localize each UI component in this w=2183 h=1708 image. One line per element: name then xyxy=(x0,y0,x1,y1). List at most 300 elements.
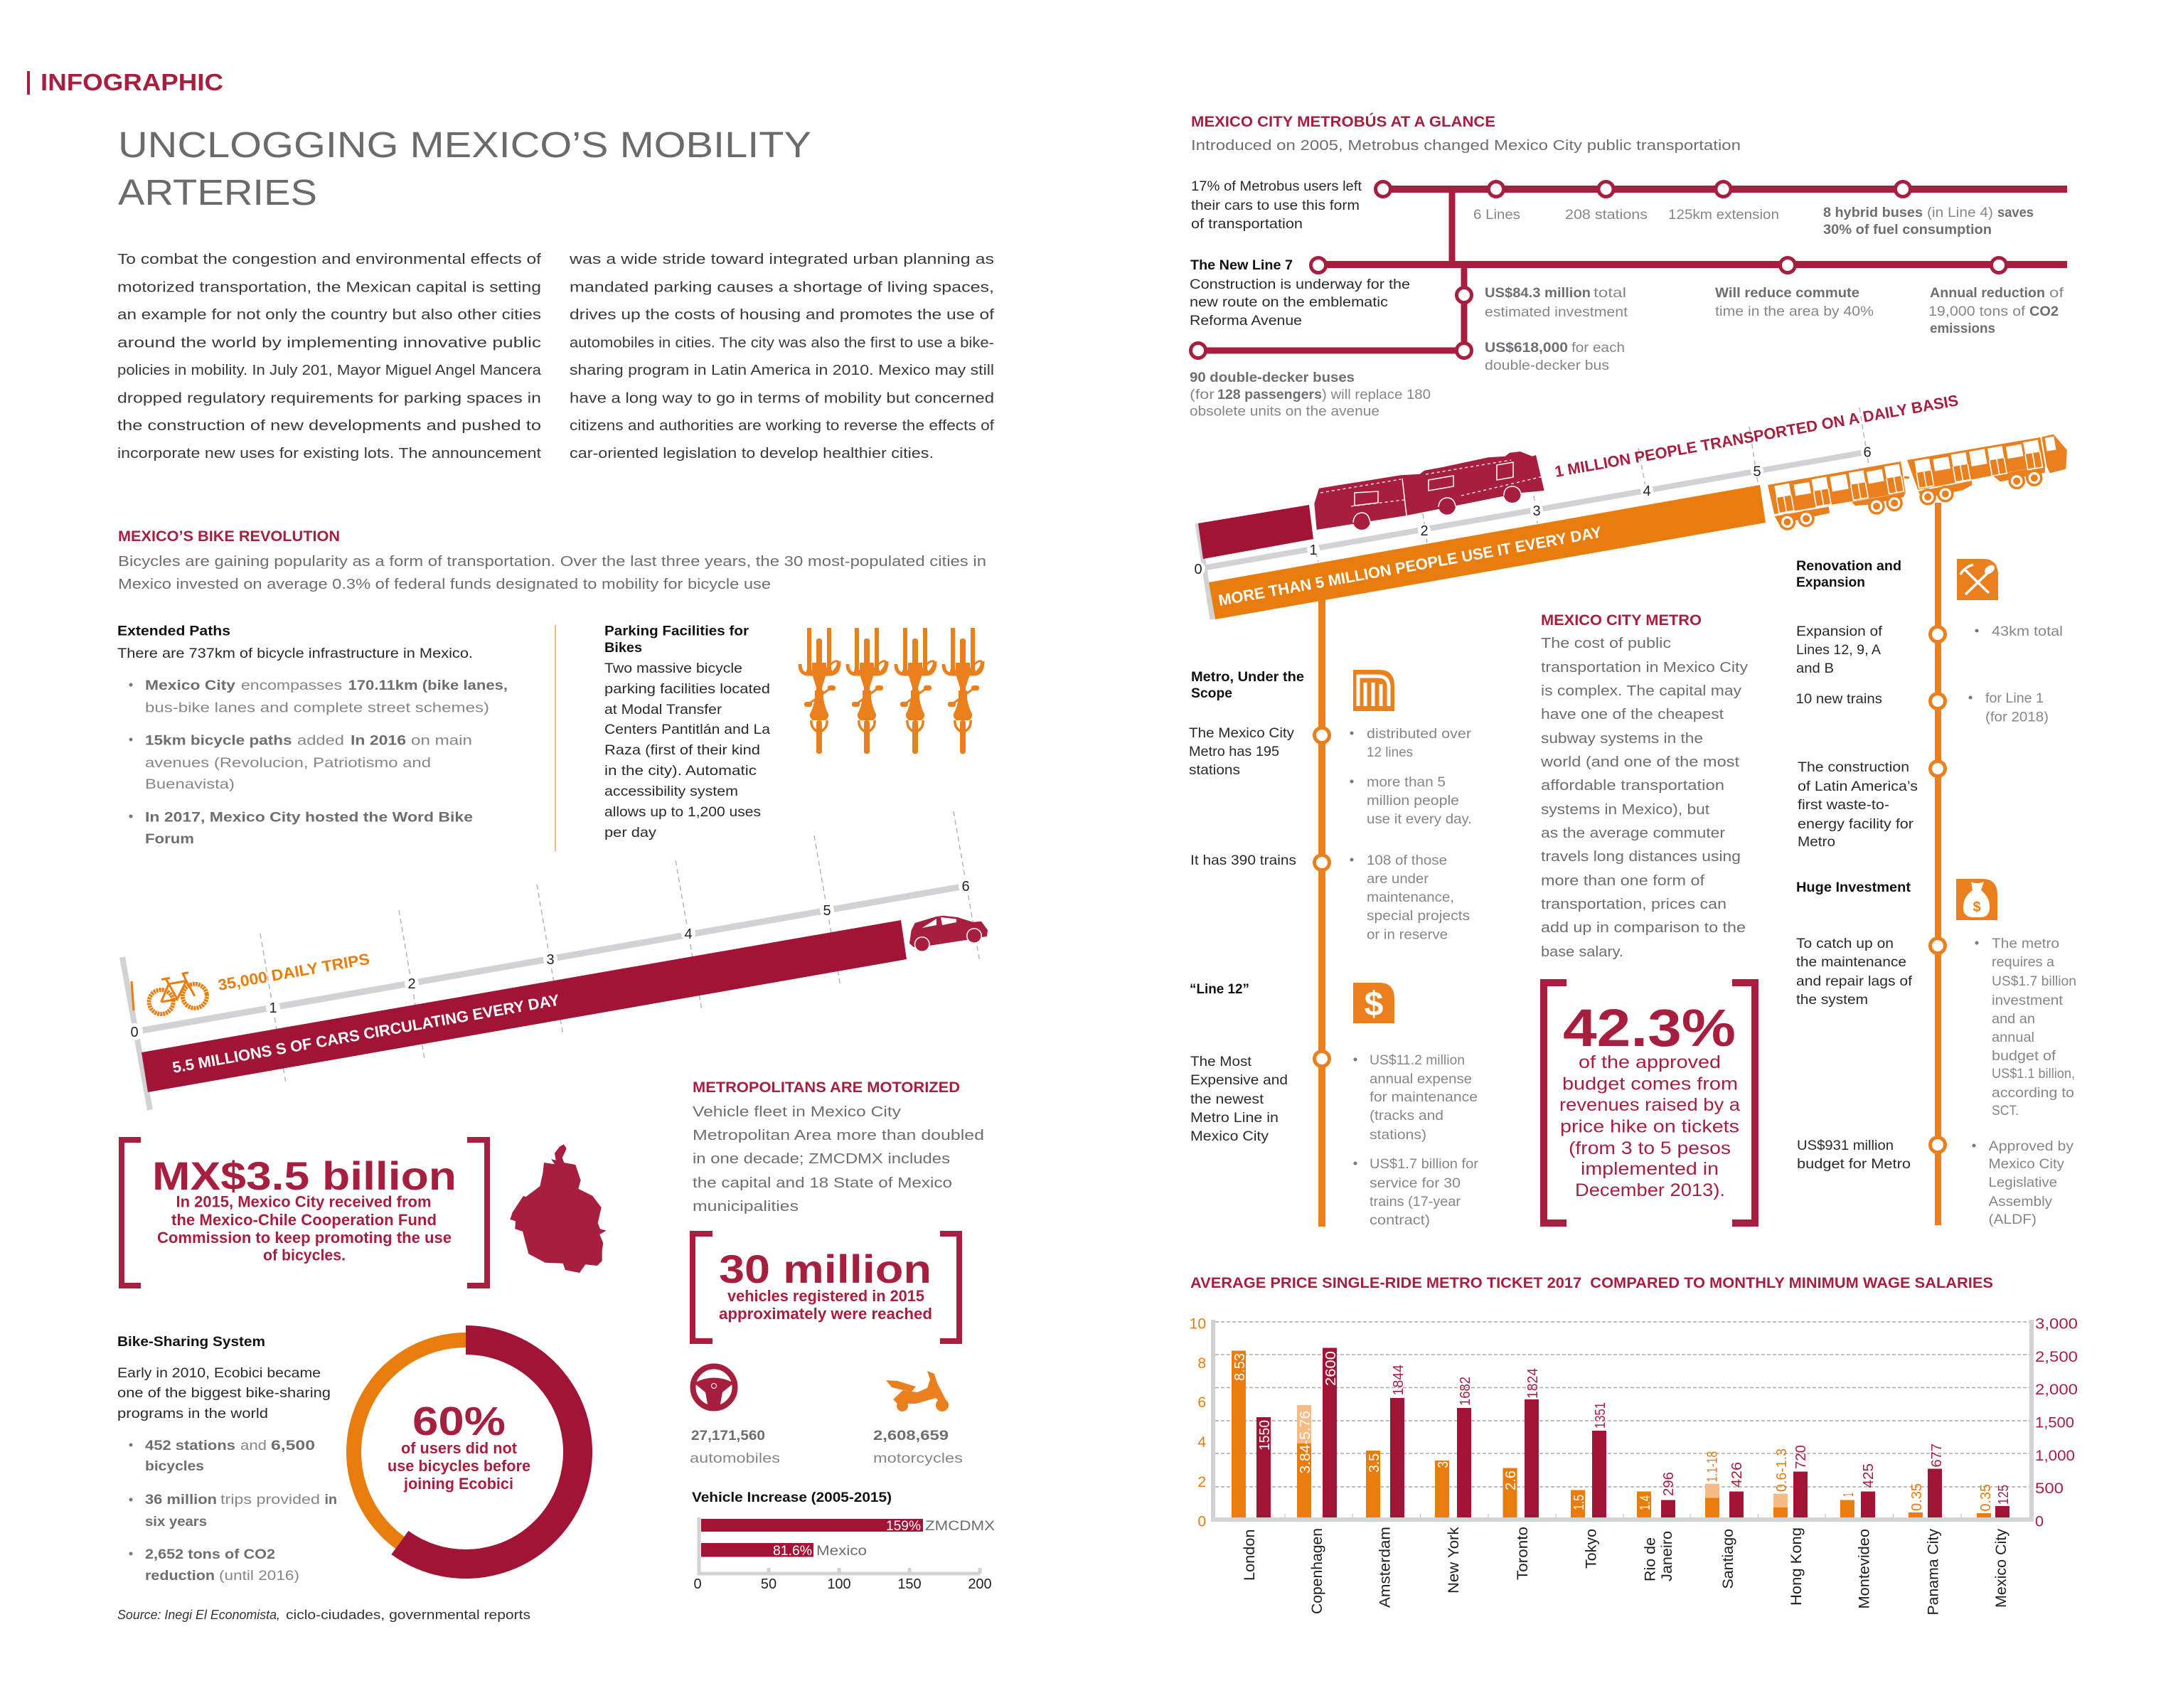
bar: Mexico: 81.6% xyxy=(773,1544,812,1559)
panel: Mexico City metro text: MEXICO CITY METRO xyxy=(1541,612,1702,629)
expansion items: (for 2018) xyxy=(1985,710,2049,725)
title xyxy=(118,124,811,213)
panel: parking facilities: at Modal Transfer xyxy=(604,702,722,717)
panel: extended paths: Buenavista) xyxy=(145,776,235,792)
expansion items: for Line 1 xyxy=(1985,690,2044,706)
line 12 details: Mexico City xyxy=(1190,1128,1269,1144)
investment items: To catch up on xyxy=(1796,936,1894,951)
investment items: budget for Metro xyxy=(1797,1156,1911,1172)
line 12 details: US$1.7 billion for xyxy=(1370,1156,1479,1172)
investment items: US$1.1 billion, xyxy=(1992,1066,2075,1082)
value labels: 0.35 xyxy=(1909,1483,1925,1511)
stop labels line 1: 30% of fuel consumption xyxy=(1823,222,1992,237)
axis numbers: 2 xyxy=(407,976,416,992)
bar chart: vehicle increase: 150 xyxy=(897,1576,922,1592)
stop labels line 2: for each xyxy=(1571,340,1625,356)
bar: ZMCDMX: ZMCDMX xyxy=(925,1519,995,1534)
axis numbers: 2 xyxy=(1420,523,1429,539)
intro text column 2: car-oriented legislation to develop healthier cities. xyxy=(570,445,934,461)
heading: metro under the scope xyxy=(1191,669,1304,701)
note: 17% left cars: of transportation xyxy=(1191,216,1303,232)
panel: extended paths: encompasses xyxy=(241,678,342,693)
line 12 details: US$11.2 million xyxy=(1370,1052,1465,1068)
bars: ticket price xyxy=(1232,1351,1991,1517)
bike trips marker xyxy=(132,981,134,1010)
city labels: Mexico City xyxy=(1993,1529,2009,1608)
icon: steering wheel xyxy=(693,1367,735,1408)
donut chart: 60%: 60% xyxy=(412,1399,506,1444)
chart title: ticket price vs wage: AVERAGE PRICE SINGLE-RIDE METRO TICKET 2017 COMPARED TO MONTHLY MINIMUM WAGE SALARIES xyxy=(1190,1275,1993,1291)
expansion items: first waste-to- xyxy=(1798,797,1889,813)
city labels: Tokyo xyxy=(1583,1529,1600,1569)
city labels: Santiago xyxy=(1720,1529,1736,1589)
panel: bike-sharing text: bicycles xyxy=(145,1458,204,1474)
note: double-decker buses: (for xyxy=(1190,387,1215,402)
panel: Mexico City metro text: add up in comparison to the xyxy=(1541,920,1746,936)
panel: extended paths: Forum xyxy=(145,831,194,847)
panel: extended paths: 170.11km (bike lanes, xyxy=(348,678,508,693)
line 12 details: Metro Line in xyxy=(1190,1110,1279,1126)
intro text column 2: citizens and authorities are working to reverse the effects of xyxy=(570,417,994,434)
panel: extended paths xyxy=(117,623,508,847)
note: double-decker buses: 90 double-decker buses xyxy=(1190,370,1355,385)
stop labels line 1: saves xyxy=(1997,205,2034,220)
label: metro riders: MORE THAN 5 MILLION PEOPLE USE IT EVERY DAY xyxy=(1217,523,1603,609)
panel: metropolitans are motorized: Metropolitan Area more than doubled xyxy=(693,1128,984,1143)
stop labels line 2: time in the area by 40% xyxy=(1715,304,1874,319)
panel: Mexico City metro text xyxy=(1540,612,1748,960)
intro text column 2: mandated parking causes a shortage of living spaces, xyxy=(570,279,994,296)
city labels: Hong Kong xyxy=(1788,1527,1805,1606)
metro-style line diagram xyxy=(1190,178,2067,420)
line 12 details: (tracks and xyxy=(1370,1108,1443,1123)
label: daily trips: 35,000 DAILY TRIPS xyxy=(217,950,371,994)
line 12 details: stations) xyxy=(1370,1127,1426,1143)
value labels: 1.5 xyxy=(1571,1495,1587,1510)
note: new line 7 xyxy=(1190,257,1410,329)
stop labels line 1: 8 hybrid buses xyxy=(1823,205,1923,220)
investment items: US$1.7 billion xyxy=(1992,973,2076,989)
intro text column 1: To combat the congestion and environmental effects of xyxy=(117,251,541,267)
stop labels line 2: Will reduce commute xyxy=(1715,285,1859,301)
donut chart: 60% xyxy=(354,1340,578,1564)
stop labels line 2: of xyxy=(2049,285,2064,301)
left axis labels: 0 xyxy=(1197,1513,1206,1530)
heading: renovation: Renovation and xyxy=(1796,558,1901,574)
investment items: requires a xyxy=(1992,954,2054,970)
investment items: Legislative xyxy=(1988,1175,2057,1190)
heading: renovation: Expansion xyxy=(1796,575,1865,590)
panel: bike-sharing text: 2,652 tons of CO2 xyxy=(145,1547,275,1562)
donut chart: 60%: joining Ecobici xyxy=(403,1475,513,1493)
city labels: Copenhagen xyxy=(1309,1528,1325,1614)
investment items: annual xyxy=(1992,1030,2034,1045)
line 12 details: annual expense xyxy=(1370,1071,1472,1087)
panel: parking facilities: allows up to 1,200 uses xyxy=(604,804,761,820)
icon: tools xyxy=(1957,559,1998,600)
city labels: Toronto xyxy=(1515,1527,1531,1580)
investment items: The metro xyxy=(1992,936,2059,951)
panel: bike-sharing text: six years xyxy=(145,1514,207,1530)
left axis labels xyxy=(1190,1315,1206,1530)
axis numbers: 4 xyxy=(684,927,693,942)
value labels: 426 xyxy=(1729,1462,1745,1488)
note: 17% left cars: 17% of Metrobus users left xyxy=(1191,178,1362,194)
panel: Mexico City metro text: as the average commuter xyxy=(1541,826,1725,841)
expansion items: Lines 12, 9, A xyxy=(1796,642,1881,658)
callout: 42.3%: revenues raised by a xyxy=(1559,1095,1740,1115)
note: new line 7: Construction is underway for the xyxy=(1190,277,1410,292)
intro text column 2 xyxy=(569,251,994,461)
stop labels line 2: 19,000 tons of xyxy=(1928,304,2026,319)
icon: money bag xyxy=(1956,879,1997,920)
slanted chart: cars vs bikes xyxy=(122,811,988,1110)
value labels: 8.53 xyxy=(1232,1353,1248,1381)
stations: distributed over xyxy=(1367,726,1472,742)
panel: Mexico City metro text: affordable transportation xyxy=(1541,778,1724,794)
city labels: Janeiro xyxy=(1659,1531,1675,1581)
icon: train car 2 xyxy=(1907,432,2072,506)
heading: Mexico's bike revolution xyxy=(118,528,986,592)
value labels: 2.6 xyxy=(1503,1471,1519,1490)
donut chart: 60%: of users did not xyxy=(401,1439,518,1457)
callout: 42.3%: budget comes from xyxy=(1562,1074,1738,1094)
investment items: Assembly xyxy=(1988,1194,2052,1210)
right axis labels: 1,000 xyxy=(2035,1448,2075,1464)
bar: metrobus xyxy=(1198,505,1313,559)
panel: parking facilities: accessibility system xyxy=(604,784,738,799)
intro text column 2: automobiles in cities. The city was also the first to use a bike- xyxy=(570,334,994,351)
value labels: 3 xyxy=(1436,1461,1451,1468)
value labels: 1.1-18 xyxy=(1705,1451,1721,1482)
panel: extended paths: In 2017, Mexico City hosted the Word Bike xyxy=(145,809,473,825)
investment items: Mexico City xyxy=(1988,1156,2064,1172)
bar chart: vehicle increase: 100 xyxy=(827,1576,851,1592)
investment items: and an xyxy=(1992,1011,2035,1027)
right axis labels: 1,500 xyxy=(2035,1415,2074,1431)
callout: 30 million xyxy=(693,1234,959,1341)
note: new line 7: Reforma Avenue xyxy=(1190,313,1302,329)
panel: extended paths: 15km bicycle paths xyxy=(145,732,292,748)
stop labels line 2: US$618,000 xyxy=(1485,340,1568,356)
note: new line 7: new route on the emblematic xyxy=(1190,294,1388,310)
value labels: 296 xyxy=(1661,1472,1677,1496)
icon: four parked bicycles xyxy=(800,628,983,754)
stop labels line 2 xyxy=(1485,285,2064,373)
line 12 details: service for 30 xyxy=(1370,1175,1461,1191)
panel: parking facilities: per day xyxy=(604,825,656,840)
stop labels line 2: Annual reduction xyxy=(1930,285,2045,301)
divider between paths and parking xyxy=(555,625,556,851)
axis numbers: 4 xyxy=(1643,484,1651,499)
icon: scooter xyxy=(886,1371,949,1411)
value labels: 125 xyxy=(1996,1485,2012,1505)
callout: MX$3.5 billion xyxy=(122,1140,487,1286)
value labels: 1682 xyxy=(1458,1377,1473,1406)
source note: Source: Inegi El Economista, xyxy=(117,1608,280,1622)
investment items: investment xyxy=(1992,993,2064,1008)
panel: extended paths: In 2016 xyxy=(351,732,406,748)
value labels: 2600 xyxy=(1323,1351,1339,1386)
bar: ZMCDMX xyxy=(701,1519,995,1534)
axis numbers: 0 xyxy=(1194,562,1202,577)
panel: extended paths: Mexico City xyxy=(145,678,235,693)
intro text column 1: motorized transportation, the Mexican capital is setting xyxy=(117,279,541,296)
panel: bike-sharing text: in xyxy=(324,1492,337,1507)
bar chart: vehicle increase: 50 xyxy=(761,1576,776,1592)
expansion items: of Latin America’s xyxy=(1798,779,1918,794)
expansion items: Expansion of xyxy=(1796,624,1883,639)
note: double-decker buses: ) will replace 180 xyxy=(1322,387,1431,402)
vehicle counts: 2,608,659 xyxy=(873,1428,949,1443)
panel: bike-sharing text: reduction xyxy=(145,1568,215,1584)
trains: are under xyxy=(1367,871,1429,887)
stop labels line 2: CO2 xyxy=(2029,304,2059,319)
title: ARTERIES xyxy=(118,172,317,213)
stations: use it every day. xyxy=(1367,811,1472,827)
bar: metro xyxy=(1209,485,1766,619)
investment items: and repair lags of xyxy=(1796,973,1913,989)
panel: bike-sharing text: trips provided xyxy=(220,1492,320,1507)
heading: Mexico's bike revolution: Bicycles are gaining popularity as a form of transportation. Over the last three years, the 30 most-populated cities in xyxy=(118,554,986,570)
investment items: according to xyxy=(1992,1085,2074,1101)
value labels: 1824 xyxy=(1525,1368,1541,1399)
note: 17% left cars: their cars to use this form xyxy=(1191,198,1360,213)
heading: line 12: “Line 12” xyxy=(1190,981,1249,997)
right axis labels: 3,000 xyxy=(2035,1315,2078,1333)
vehicle counts xyxy=(690,1428,963,1466)
stations: million people xyxy=(1367,793,1459,808)
panel: metropolitans are motorized: the capital and 18 State of Mexico xyxy=(693,1175,952,1191)
panel: Mexico City metro text: The cost of public xyxy=(1541,636,1671,651)
callout: MX$3.5 billion: the Mexico-Chile Cooperation Fund xyxy=(171,1211,437,1229)
axis numbers: 0 xyxy=(130,1025,139,1040)
value labels: 0.35 xyxy=(1978,1484,1994,1512)
panel: parking facilities: Parking Facilities for xyxy=(604,623,749,639)
stations: stations xyxy=(1189,762,1240,778)
panel: bike-sharing text: 6,500 xyxy=(271,1438,315,1453)
trains xyxy=(1190,853,1470,943)
left axis labels: 10 xyxy=(1190,1315,1206,1333)
bar chart: vehicle increase: 0 xyxy=(693,1576,702,1592)
value labels: 1550 xyxy=(1257,1420,1273,1451)
donut chart: 60%: use bicycles before xyxy=(388,1457,530,1475)
left axis labels: 2 xyxy=(1197,1474,1206,1490)
panel: Mexico City metro text: more than one form of xyxy=(1541,873,1705,889)
trains: 108 of those xyxy=(1367,853,1447,868)
axis numbers: 6 xyxy=(1863,445,1872,461)
trains: maintenance, xyxy=(1367,890,1454,905)
axis numbers: 1 xyxy=(269,1000,277,1016)
expansion items: 10 new trains xyxy=(1796,691,1882,707)
heading: Mexico's bike revolution: MEXICO’S BIKE REVOLUTION xyxy=(118,528,340,545)
slanted chart: metrobus vs metro riders xyxy=(1191,391,2072,619)
left axis labels: 4 xyxy=(1197,1434,1206,1451)
value labels: 3.84-5.76 xyxy=(1298,1411,1313,1473)
line 12 details: contract) xyxy=(1370,1212,1430,1228)
heading: Mexico's bike revolution: Mexico invested on average 0.3% of federal funds designated to mobility for bicycle use xyxy=(118,577,771,592)
panel: bike-sharing text: Early in 2010, Ecobici became xyxy=(117,1365,321,1381)
callout: 42.3% xyxy=(1544,983,1755,1223)
vehicle counts: motorcycles xyxy=(873,1451,963,1466)
city labels: New York xyxy=(1446,1527,1462,1594)
intro text column 2: have a long way to go in terms of mobility but concerned xyxy=(570,390,994,407)
callout: MX$3.5 billion: MX$3.5 billion xyxy=(152,1153,457,1198)
line 12 details: trains (17-year xyxy=(1370,1194,1461,1210)
panel: Mexico City metro text: have one of the cheapest xyxy=(1541,707,1724,722)
vehicle counts: 27,171,560 xyxy=(691,1428,765,1443)
stop labels line 1: 6 Lines xyxy=(1473,207,1520,223)
panel: bike-sharing text: Bike-Sharing System xyxy=(117,1334,265,1350)
investment items: budget of xyxy=(1992,1048,2056,1064)
callout: 42.3%: (from 3 to 5 pesos xyxy=(1569,1138,1731,1158)
line 12 details: The Most xyxy=(1190,1054,1252,1069)
panel: metropolitans are motorized: municipalities xyxy=(693,1199,799,1215)
stations: more than 5 xyxy=(1367,774,1446,790)
axis numbers: 1 xyxy=(1309,543,1318,558)
panel: bike-sharing text: (until 2016) xyxy=(219,1568,299,1584)
investment items: the maintenance xyxy=(1796,954,1906,970)
panel: Mexico City metro text: base salary. xyxy=(1541,944,1623,960)
heading: metro under the scope: Scope xyxy=(1191,685,1232,701)
bars: minimum wage xyxy=(1256,1348,2009,1517)
callout: MX$3.5 billion: of bicycles. xyxy=(263,1246,346,1264)
city labels: Rio de xyxy=(1643,1537,1658,1581)
intro text column 1: policies in mobility. In July 201, Mayor Miguel Angel Mancera xyxy=(117,362,542,378)
heading: Metrobús at a glance: Introduced on 2005, Metrobus changed Mexico City public transportation xyxy=(1191,138,1741,154)
panel: Mexico City metro text: subway systems in the xyxy=(1541,731,1703,747)
panel: bike-sharing text: programs in the world xyxy=(117,1406,268,1421)
value labels: 1 xyxy=(1841,1493,1857,1497)
icon: car xyxy=(909,916,988,952)
intro text column 2: sharing program in Latin America in 2010. Mexico may still xyxy=(570,362,994,378)
right axis labels: 2,000 xyxy=(2035,1382,2078,1398)
icon: train car 1 xyxy=(1768,461,1909,531)
value labels: 425 xyxy=(1861,1463,1877,1488)
panel: extended paths: Extended Paths xyxy=(117,623,230,639)
investment items: SCT. xyxy=(1992,1103,2019,1119)
callout: 42.3%: December 2013). xyxy=(1575,1180,1725,1200)
investment items: the system xyxy=(1796,992,1868,1008)
callout: 42.3%: implemented in xyxy=(1581,1159,1719,1179)
line 12 details: the newest xyxy=(1190,1091,1264,1107)
value labels: 720 xyxy=(1793,1445,1809,1469)
icon: dollar xyxy=(1353,983,1394,1023)
panel: parking facilities: Raza (first of their kind xyxy=(604,742,760,758)
panel: metropolitans are motorized: METROPOLITANS ARE MOTORIZED xyxy=(693,1079,960,1096)
stations: The Mexico City xyxy=(1189,725,1294,741)
stop labels line 2: US$84.3 million xyxy=(1485,285,1591,301)
note: double-decker buses: obsolete units on the avenue xyxy=(1190,404,1379,420)
timeline: metro, right xyxy=(1796,503,2076,1227)
stations: Metro has 195 xyxy=(1189,744,1279,759)
panel: Mexico City metro text: is complex. The capital may xyxy=(1541,683,1741,699)
stop labels line 1: (in Line 4) xyxy=(1927,205,1993,220)
intro text column 1: around the world by implementing innovative public xyxy=(117,334,541,351)
city labels: London xyxy=(1242,1529,1258,1581)
panel: extended paths: There are 737km of bicycle infrastructure in Mexico. xyxy=(117,646,473,661)
heading: metro under the scope: Metro, Under the xyxy=(1191,669,1304,685)
line 12 details: Expensive and xyxy=(1190,1072,1288,1088)
heading: Metrobús at a glance xyxy=(1191,113,1741,154)
intro text column 2: was a wide stride toward integrated urban planning as xyxy=(569,251,994,267)
stop labels line 2: estimated investment xyxy=(1485,304,1628,320)
axis numbers: 5 xyxy=(823,903,831,919)
trains: or in reserve xyxy=(1367,927,1448,943)
value labels: 1351 xyxy=(1593,1402,1608,1429)
bar label: 5.5 MILLIONS S OF CARS CIRCULATING EVERY DAY xyxy=(171,991,561,1077)
stop labels line 2: emissions xyxy=(1930,321,1995,336)
callout: MX$3.5 billion: In 2015, Mexico City received from xyxy=(176,1193,431,1210)
panel: Mexico City metro text: travels long distances using xyxy=(1541,849,1741,865)
panel: bike-sharing text: one of the biggest bike-sharing xyxy=(117,1385,331,1401)
investment items: US$931 million xyxy=(1797,1138,1894,1153)
expansion items: energy facility for xyxy=(1798,816,1914,832)
line 12 details: for maintenance xyxy=(1370,1089,1478,1105)
panel: metropolitans are motorized: in one decade; ZMCDMX includes xyxy=(693,1151,950,1167)
city labels: Panama City xyxy=(1926,1528,1941,1616)
panel: bike-sharing text: 452 stations xyxy=(145,1438,235,1453)
investment items xyxy=(1796,936,2076,1227)
intro text column 1: incorporate new uses for existing lots. The announcement xyxy=(117,445,541,461)
source note: ciclo-ciudades, governmental reports xyxy=(286,1608,530,1622)
label: metrobus riders: 1 MILLION PEOPLE TRANSPORTED ON A DAILY BASIS xyxy=(1553,391,1960,481)
left axis labels: 6 xyxy=(1197,1394,1206,1411)
callout: MX$3.5 billion: Commission to keep promoting the use xyxy=(157,1229,452,1247)
right axis labels xyxy=(2035,1315,2078,1530)
vehicle counts: automobiles xyxy=(690,1451,780,1466)
callout: 30 million: approximately were reached xyxy=(719,1305,932,1323)
investment items: (ALDF) xyxy=(1988,1212,2037,1227)
right axis labels: 500 xyxy=(2035,1480,2064,1497)
panel: extended paths: added xyxy=(297,732,344,748)
panel: bike-sharing text: 36 million xyxy=(145,1492,217,1507)
axis numbers xyxy=(1191,445,1874,577)
axis numbers: 5 xyxy=(1753,464,1761,479)
value labels: 677 xyxy=(1929,1443,1945,1468)
axis numbers: 3 xyxy=(1532,503,1541,519)
heading: renovation xyxy=(1796,558,1901,590)
panel: parking facilities: in the city). Automatic xyxy=(604,763,757,779)
icon: Mexico City map xyxy=(510,1144,607,1273)
panel: Mexico City metro text: transportation in Mexico City xyxy=(1541,660,1748,676)
panel: metropolitans are motorized xyxy=(693,1079,984,1215)
heading: Metrobús at a glance: MEXICO CITY METROBÚS AT A GLANCE xyxy=(1191,113,1495,130)
investment items: Approved by xyxy=(1988,1138,2073,1154)
source note xyxy=(117,1608,530,1622)
intro text column 1: an example for not only the country but also other cities xyxy=(117,306,541,323)
trains: special projects xyxy=(1367,908,1470,924)
note: double-decker buses: 128 passengers xyxy=(1217,387,1322,402)
panel: bike-sharing text xyxy=(117,1334,337,1584)
stop labels line 2: double-decker bus xyxy=(1485,358,1609,373)
value labels: 1844 xyxy=(1391,1365,1407,1395)
title: UNCLOGGING MEXICO’S MOBILITY xyxy=(118,124,811,165)
callout: 42.3%: 42.3% xyxy=(1563,998,1736,1057)
stations xyxy=(1189,725,1472,827)
stop labels line 1 xyxy=(1473,205,2034,237)
panel: Mexico City metro text: systems in Mexico), but xyxy=(1541,802,1709,818)
expansion items: Metro xyxy=(1798,834,1835,850)
expansion items: 43km total xyxy=(1992,624,2063,639)
panel: metropolitans are motorized: Vehicle fleet in Mexico City xyxy=(693,1104,901,1120)
panel: parking facilities xyxy=(604,623,770,840)
axis numbers: 3 xyxy=(546,952,555,968)
panel: extended paths: bus-bike lanes and complete street schemes) xyxy=(145,700,489,715)
icon: metro logo xyxy=(1353,670,1394,711)
callout: 42.3%: price hike on tickets xyxy=(1560,1116,1739,1136)
stations: 12 lines xyxy=(1367,744,1413,760)
